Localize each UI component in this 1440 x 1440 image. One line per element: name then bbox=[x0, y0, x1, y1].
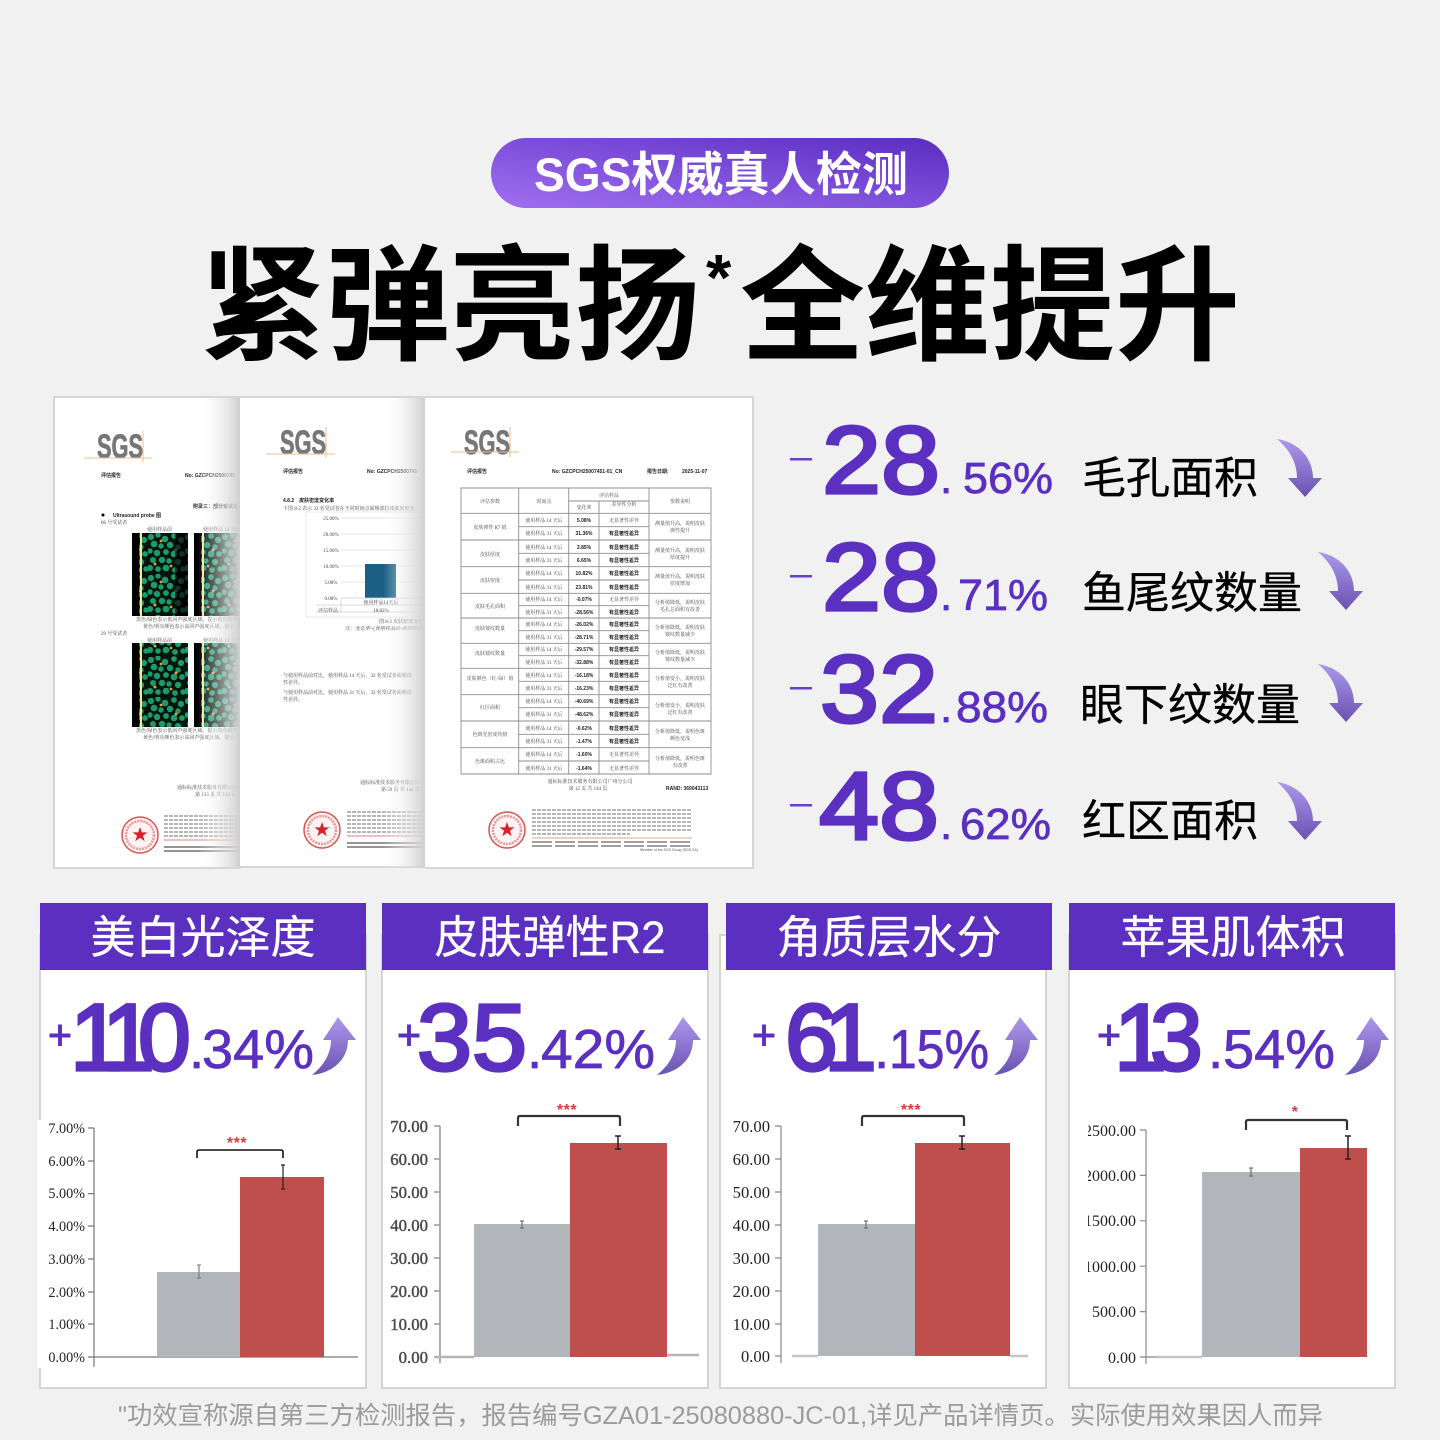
bar chart: 1.00% bbox=[48, 1317, 85, 1333]
bar chart: 3.00% bbox=[48, 1252, 85, 1268]
stat: 鱼尾纹数量 -28.71%: . bbox=[940, 571, 952, 620]
report page 3: results table bbox=[425, 397, 753, 868]
report page 1: ultrasound images: 黄色/明亮颜色表示高回声强度区域。提示 bbox=[143, 623, 235, 630]
report page 3: results table: Member of the SGS Group (SGS SA) bbox=[640, 848, 698, 852]
report page 3: results table: 分析值降低，说明皮肤 bbox=[655, 649, 705, 656]
report page 1: ultrasound images bbox=[54, 397, 241, 868]
report page 3: results table: 10.82% bbox=[576, 571, 593, 577]
report page 2: density chart: 0.00% bbox=[325, 597, 337, 602]
bar chart: 4.00% bbox=[48, 1219, 85, 1235]
report page 3: results table: -1.60% bbox=[576, 752, 592, 758]
report page 3: results table: -29.57% bbox=[575, 647, 594, 653]
report page 3: results table: 有显著性差异 bbox=[609, 646, 639, 653]
report page 3: results table: 有显著性差异 bbox=[609, 621, 639, 628]
report page 3: results table: 2025-11-07 bbox=[682, 469, 708, 475]
title: 紧 bbox=[200, 238, 325, 377]
report page 3: results table: 使用样品 14 天后 bbox=[525, 544, 563, 551]
value +110.34%: . bbox=[189, 1018, 204, 1080]
report page 2: density chart: 评估样品 bbox=[318, 607, 338, 614]
report page 3: results table: 第 12 页 共 144 页 bbox=[569, 785, 607, 792]
badge: SGS权威真人检测: SGS权威真人检测 bbox=[534, 148, 908, 201]
report page 3: results table: 有显著性差异 bbox=[609, 698, 639, 705]
report page 1: ultrasound images: 29 号受试者 bbox=[101, 630, 127, 637]
value +110.34% bbox=[48, 985, 356, 1091]
header: 苹果肌体积 bbox=[1120, 912, 1346, 963]
report page 3: results table: 使用样品 14 天后 bbox=[525, 621, 563, 628]
report page 3: results table: 皮肤皱纹数量 bbox=[475, 625, 505, 632]
bar chart bbox=[48, 1121, 358, 1367]
panel: 美白光泽度 bbox=[37, 903, 366, 1388]
report page 2: density chart: 第 59 页 共 144 页 bbox=[381, 786, 420, 793]
report page 3: results table: 使用样品 14 天后 bbox=[525, 570, 563, 577]
value +35.42%: 35 bbox=[417, 985, 527, 1091]
bar chart: 1000.00 bbox=[1084, 1259, 1136, 1276]
report page 3: results table: 使用样品 14 天后 bbox=[525, 725, 563, 732]
bar chart: 40.00 bbox=[390, 1216, 428, 1235]
report page 3: results table: 5.08% bbox=[577, 518, 592, 524]
report page 3: results table: 有显著性差异 bbox=[609, 530, 639, 537]
report page 2: density chart: No: GZCPCH2500745 bbox=[367, 469, 418, 475]
report page 3: results table: 31.36% bbox=[576, 531, 593, 537]
report page 3: results table: 有显著性差异 bbox=[609, 584, 639, 591]
report page 3: results table: 毛孔总面积有改善 bbox=[660, 606, 700, 613]
report page 2: density chart: 通标标准技术服务有限公司 bbox=[360, 779, 420, 786]
title: 扬 bbox=[575, 238, 700, 377]
bar chart: 5.00% bbox=[48, 1186, 85, 1202]
report page 3: results table: -28.56% bbox=[575, 610, 594, 616]
title: 提 bbox=[990, 238, 1115, 377]
report page 3: results table: 分析值变小，说明皮肤 bbox=[655, 702, 705, 709]
bar chart: 50.00 bbox=[390, 1183, 428, 1202]
header bbox=[382, 903, 708, 970]
report page 3: results table: 评估样品 bbox=[599, 492, 619, 499]
report page 3: results table: 使用样品 31 天后 bbox=[525, 711, 563, 718]
report page 3: results table: 通标标准技术服务有限公司广州分公司 bbox=[547, 778, 633, 785]
report page 2: density chart: 图 8-2 皮肤密度变化 bbox=[379, 618, 423, 625]
report page 3: results table: -32.88% bbox=[575, 660, 594, 666]
panel: 苹果肌体积 bbox=[1069, 903, 1395, 1388]
stat: 眼下纹数量 -32.88%: 88% bbox=[956, 683, 1048, 732]
bar chart: 0.00% bbox=[48, 1350, 85, 1366]
report page 3: results table: 无显著性差异 bbox=[609, 517, 639, 524]
report page 2: density chart: 与使用样品前对比，使用样品 14 天后，32 名受试者面颊部 bbox=[283, 672, 412, 679]
stat: 红区面积 -48.62%: . bbox=[940, 800, 952, 849]
report page 3: results table: 有显著性差异 bbox=[609, 634, 639, 641]
header bbox=[1069, 903, 1395, 970]
value +61.15%: + bbox=[752, 1011, 776, 1058]
report page 2: density chart: 10.00% bbox=[323, 565, 339, 570]
report page 3: results table: 有显著性差异 bbox=[609, 557, 639, 564]
report page 3: results table: 无显著性差异 bbox=[609, 765, 639, 772]
value +110.34%: 34% bbox=[202, 1018, 314, 1080]
panel: 角质层水分 bbox=[720, 903, 1052, 1388]
stat: 红区面积 -48.62%: 红区面积 bbox=[1082, 797, 1258, 846]
report page 3: results table: 使用样品 31 天后 bbox=[525, 634, 563, 641]
report page 3: results table: -40.69% bbox=[575, 699, 594, 705]
report page 3: results table: 测量值升高，说明皮肤 bbox=[655, 520, 705, 527]
value +13.54%: . bbox=[1208, 1018, 1223, 1080]
footnote: "功效宣称源自第三方检测报告，报告编号GZA01-25080880-JC-01,详见产品详情页。实际使用效果因人而异 bbox=[118, 1402, 1323, 1430]
bar chart: 40.00 bbox=[733, 1216, 770, 1235]
report page 3: results table: 皮肤厚度 bbox=[480, 551, 500, 558]
bar chart bbox=[733, 1102, 1028, 1366]
report page 2: density chart bbox=[240, 397, 429, 868]
report page 3: results table: 使用样品 14 天后 bbox=[525, 698, 563, 705]
value +110.34%: + bbox=[48, 1011, 72, 1058]
report page 1: ultrasound images: 黄色/明亮颜色表示高回声强度区域。提示 bbox=[143, 734, 235, 741]
report page 3: results table: 分析值降低，说明色斑 bbox=[655, 755, 705, 762]
report page 3: results table: -48.62% bbox=[575, 712, 594, 718]
bar chart: 60.00 bbox=[733, 1150, 770, 1169]
report page 3: results table: 颜色变浅 bbox=[670, 735, 690, 742]
results table grid bbox=[461, 488, 711, 774]
report page 1: ultrasound images: 使用样品 14 天后 bbox=[203, 637, 241, 644]
report page 3: results table: -26.02% bbox=[575, 622, 594, 628]
value +35.42%: + bbox=[397, 1011, 421, 1058]
bar chart: 0.00 bbox=[741, 1347, 770, 1366]
value +61.15%: 61 bbox=[785, 985, 877, 1091]
value +13.54% bbox=[1097, 985, 1389, 1091]
report page 1: ultrasound images: 黑色/绿色表示低回声强度区域。提示真有回声 bbox=[136, 727, 237, 734]
value +35.42%: 42% bbox=[541, 1018, 655, 1080]
report page 3: results table: 23.81% bbox=[576, 585, 593, 591]
bar chart: 10.00 bbox=[733, 1315, 770, 1334]
title: 全 bbox=[740, 238, 865, 377]
report page 3: results table: 使用样品 31 天后 bbox=[525, 530, 563, 537]
report page 3: results table: 测量值升高，说明皮肤 bbox=[655, 547, 705, 554]
report page 3: results table: 分析值降低，说明色斑 bbox=[655, 728, 705, 735]
report page 3: results table: 有显著性差异 bbox=[609, 725, 639, 732]
report page 3: results table: -16.23% bbox=[575, 686, 594, 692]
value +13.54%: 13 bbox=[1114, 985, 1203, 1091]
report page 2: density chart: 性差异。 bbox=[283, 696, 303, 703]
report page 3: results table: 有显著性差异 bbox=[609, 570, 639, 577]
report page 3: results table: 色斑面积占比 bbox=[475, 758, 505, 765]
bar chart: 2.00% bbox=[48, 1285, 85, 1301]
report page 3: results table: -28.71% bbox=[575, 635, 594, 641]
value +35.42%: . bbox=[527, 1018, 542, 1080]
report page 3: results table: 皱纹数量减少 bbox=[665, 631, 695, 638]
bar chart: 30.00 bbox=[390, 1249, 428, 1268]
stat: 红区面积 -48.62%: 62% bbox=[960, 800, 1051, 849]
badge: SGS权威真人检测 bbox=[491, 138, 949, 208]
report page 3: results table: 无显著性差异 bbox=[609, 596, 639, 603]
report page 3: results table: 使用样品 31 天后 bbox=[525, 584, 563, 591]
report page 3: results table: 使用样品 31 天后 bbox=[525, 738, 563, 745]
title bbox=[200, 238, 1240, 377]
bar chart: 500.00 bbox=[1092, 1304, 1136, 1321]
report page 1: ultrasound images: 使用样品 14 天后 bbox=[203, 526, 241, 533]
report page 3: results table: 泛红有改善 bbox=[667, 709, 693, 716]
report page 2: density chart: 25.00% bbox=[323, 517, 339, 522]
stat: 毛孔面积 -28.56% bbox=[790, 407, 1322, 514]
report page 3: results table: 参数说明 bbox=[670, 498, 690, 505]
report page 2: density chart: 4.8.2 皮肤密度变化率 bbox=[283, 497, 334, 504]
report page 1: ultrasound images: 通标标准技术服务有限公司 bbox=[177, 784, 237, 791]
report page 3: results table: 有显著性差异 bbox=[609, 544, 639, 551]
report page 2: density chart: SGS bbox=[280, 424, 326, 462]
bar chart: 30.00 bbox=[733, 1249, 770, 1268]
bar chart: 70.00 bbox=[390, 1117, 428, 1136]
report page 1: ultrasound images: 附录三：部分受试者 bbox=[193, 503, 238, 510]
report page 3: results table: 差异性分析 bbox=[611, 501, 637, 508]
stat: 眼下纹数量 -32.88%: 眼下纹数量 bbox=[1080, 681, 1300, 730]
value +61.15% bbox=[752, 985, 1038, 1091]
bar chart: 50.00 bbox=[733, 1183, 770, 1202]
report page 3: results table: 有显著性差异 bbox=[609, 672, 639, 679]
report page 3: results table: 皮肤皱纹数量 bbox=[475, 650, 505, 657]
report page 3: results table: 泛红有改善 bbox=[667, 682, 693, 689]
bar chart bbox=[1084, 1104, 1367, 1367]
report page 3: results table: 分析值变小，说明皮肤 bbox=[655, 675, 705, 682]
report page 3: results table: 皮肤毛孔面积 bbox=[475, 603, 506, 610]
bar chart: 70.00 bbox=[733, 1117, 770, 1136]
report page 2: density chart: 评估报告 bbox=[283, 468, 303, 475]
report page 3: results table: 分析值降低，说明皮肤 bbox=[655, 599, 705, 606]
stat: 眼下纹数量 -32.88%: . bbox=[940, 683, 952, 732]
report page 1: ultrasound images: 第 133 页 共 144 页 bbox=[195, 791, 236, 798]
report page 3: results table: 红区面积 bbox=[480, 704, 501, 711]
report page 2: density chart: 15.00% bbox=[323, 549, 339, 554]
stat: 毛孔面积 -28.56%: 56% bbox=[963, 454, 1053, 503]
report page 2: density chart: 性差异。 bbox=[283, 679, 303, 686]
report page 1: ultrasound images: 06 号受试者 bbox=[101, 519, 127, 526]
report page 3: results table: 皮肤密度 bbox=[480, 577, 500, 584]
value +110.34%: 110 bbox=[70, 985, 191, 1091]
bar chart: 2000.00 bbox=[1084, 1168, 1136, 1185]
report page 3: results table: 分析值降低，说明皮肤 bbox=[655, 624, 705, 631]
bar chart: *** bbox=[227, 1135, 247, 1152]
stat: 眼下纹数量 -32.88%: 32 bbox=[820, 636, 938, 743]
bar chart: 1500.00 bbox=[1084, 1213, 1136, 1230]
stat: 鱼尾纹数量 -28.71% bbox=[790, 524, 1363, 631]
bar chart: 0.00 bbox=[399, 1348, 428, 1367]
bar chart: 7.00% bbox=[48, 1121, 85, 1137]
bar chart: 60.00 bbox=[390, 1150, 428, 1169]
report page 1: ultrasound images: No: GZCPCH2500745 bbox=[185, 473, 236, 479]
header: 美白光泽度 bbox=[90, 912, 316, 963]
bar chart: 10.00 bbox=[390, 1315, 428, 1334]
value +35.42% bbox=[397, 985, 701, 1091]
report page 3: results table: 密度增加 bbox=[670, 580, 690, 587]
report page 3: results table: 3.85% bbox=[577, 545, 592, 551]
stat: 红区面积 -48.62% bbox=[790, 753, 1322, 860]
report page 3: results table: 使用样品 14 天后 bbox=[525, 672, 563, 679]
report page 1: ultrasound images: 使用样品前 bbox=[147, 637, 172, 644]
report page 3: results table: 使用样品 31 天后 bbox=[525, 765, 563, 772]
report page 3: results table: 变化率 bbox=[576, 504, 592, 511]
report page 3: results table: 皮肤弹性 R7 值 bbox=[473, 524, 507, 531]
report page 3: results table: 测量值升高，说明皮肤 bbox=[655, 573, 705, 580]
title: 升 bbox=[1115, 238, 1240, 377]
value +13.54%: + bbox=[1097, 1011, 1121, 1058]
header bbox=[40, 903, 366, 970]
report page 3: results table: 有显著性差异 bbox=[609, 738, 639, 745]
title: 弹 bbox=[325, 238, 450, 377]
stat: 红区面积 -48.62%: 48 bbox=[819, 753, 939, 860]
report page 3: results table: 使用样品 31 天后 bbox=[525, 659, 563, 666]
report page 2: density chart: 下图 8-2 表示 32 名受试者在不同时间点面颊部位皮肤密度变 bbox=[283, 505, 415, 512]
report page 3: results table: 弹性提升 bbox=[670, 527, 690, 534]
report page 3: results table: 使用样品 31 天后 bbox=[525, 685, 563, 692]
report page 2: density chart: 10.82% bbox=[373, 609, 389, 614]
panel: 皮肤弹性R2 bbox=[382, 903, 708, 1388]
title: 维 bbox=[865, 238, 990, 377]
bar chart: *** bbox=[557, 1102, 577, 1119]
bar chart: 6.00% bbox=[48, 1154, 85, 1170]
report page 3: results table: -0.62% bbox=[576, 726, 592, 732]
report page 2: density chart: 注：变化率=(使用样品后-使用样品前) bbox=[345, 625, 429, 632]
bar chart: * bbox=[1292, 1104, 1299, 1121]
report page 2: density chart: 5.00% bbox=[325, 581, 337, 586]
report page 3: results table: 报告日期: bbox=[647, 468, 669, 475]
header bbox=[726, 903, 1052, 970]
value +61.15%: 15% bbox=[889, 1018, 989, 1080]
report page 3: results table: 有显著性差异 bbox=[609, 609, 639, 616]
report page 3: results table: -1.64% bbox=[576, 766, 592, 772]
bar chart: 20.00 bbox=[733, 1282, 770, 1301]
report page 3: results table: SGS bbox=[464, 424, 510, 462]
title: * bbox=[706, 241, 732, 314]
report page 2: density chart: 20.00% bbox=[323, 533, 339, 538]
report page 3: results table: RAND: 369043113 bbox=[666, 786, 708, 792]
title: 亮 bbox=[450, 238, 575, 377]
bar chart: 0.00 bbox=[1108, 1350, 1136, 1367]
report page 3: results table: 厚度提升 bbox=[670, 554, 690, 561]
report page 1: ultrasound images: 黑色/绿色表示低回声强度区域。提示真有回声 bbox=[136, 616, 237, 623]
stat: 鱼尾纹数量 -28.71%: 鱼尾纹数量 bbox=[1082, 569, 1302, 618]
stat: 鱼尾纹数量 -28.71%: 28 bbox=[822, 524, 940, 631]
report page 3: results table: 6.65% bbox=[577, 558, 592, 564]
report page 3: results table: -1.47% bbox=[576, 739, 592, 745]
report page 1: ultrasound images: 评估报告 bbox=[101, 472, 121, 479]
report page 3: results table: 有显著性差异 bbox=[609, 685, 639, 692]
report page 3: results table: 使用样品 31 天后 bbox=[525, 557, 563, 564]
value +13.54%: 54% bbox=[1223, 1018, 1335, 1080]
bar chart: *** bbox=[901, 1102, 921, 1119]
stat: 鱼尾纹数量 -28.71%: 71% bbox=[958, 571, 1048, 620]
stat: 眼下纹数量 -32.88% bbox=[790, 636, 1363, 743]
value +61.15%: . bbox=[874, 1018, 889, 1080]
report page 3: results table: 评估参数 bbox=[480, 498, 500, 505]
bar chart: 2500.00 bbox=[1084, 1123, 1136, 1140]
report page 2: density chart: 使用样品14天后 bbox=[363, 599, 399, 606]
header: 角质层水分 bbox=[776, 912, 1002, 963]
report page 1: ultrasound images: 使用样品前 bbox=[147, 526, 172, 533]
report page 3: results table: 使用样品 31 天后 bbox=[525, 609, 563, 616]
report page 2: density chart: 与使用样品前对比，使用样品 31 天后，32 名受试者面颊部 bbox=[283, 689, 412, 696]
report page 3: results table: 评估报告 bbox=[467, 468, 487, 475]
report page 3: results table: 时间点 bbox=[536, 498, 552, 505]
bar chart bbox=[390, 1102, 699, 1367]
panel: SGS report pages bbox=[54, 397, 753, 868]
stat: 毛孔面积 -28.56%: . bbox=[940, 454, 952, 503]
stat: 毛孔面积 -28.56%: 毛孔面积 bbox=[1082, 454, 1258, 503]
report page 1: ultrasound images: Ultrasound probe 图 bbox=[113, 513, 161, 519]
report page 3: results table: 使用样品 14 天后 bbox=[525, 751, 563, 758]
report page 3: results table: 使用样品 14 天后 bbox=[525, 646, 563, 653]
stat: 毛孔面积 -28.56%: 28 bbox=[822, 407, 940, 514]
report page 3: results table: 无显著性差异 bbox=[609, 751, 639, 758]
report page 3: results table: -16.18% bbox=[575, 673, 594, 679]
header: 皮肤弹性R2 bbox=[434, 912, 666, 963]
report page 3: results table: 有显著性差异 bbox=[609, 659, 639, 666]
report page 1: ultrasound images: SGS bbox=[97, 428, 143, 466]
report page 3: results table: 有改善 bbox=[672, 762, 688, 769]
report page 3: results table: 皮肤颜色（红-绿）值 bbox=[467, 675, 513, 682]
report page 3: results table: 使用样品 14 天后 bbox=[525, 517, 563, 524]
report page 3: results table: 皱纹数量减少 bbox=[665, 656, 695, 663]
report page 3: results table: 色斑光密度均值 bbox=[472, 731, 508, 738]
bar chart: 20.00 bbox=[390, 1282, 428, 1301]
report page 3: results table: 有显著性差异 bbox=[609, 711, 639, 718]
report page 3: results table: No: GZCPCH25007451-01_CN bbox=[552, 469, 623, 475]
report page 3: results table: -0.07% bbox=[576, 597, 592, 603]
report page 3: results table: 使用样品 14 天后 bbox=[525, 596, 563, 603]
